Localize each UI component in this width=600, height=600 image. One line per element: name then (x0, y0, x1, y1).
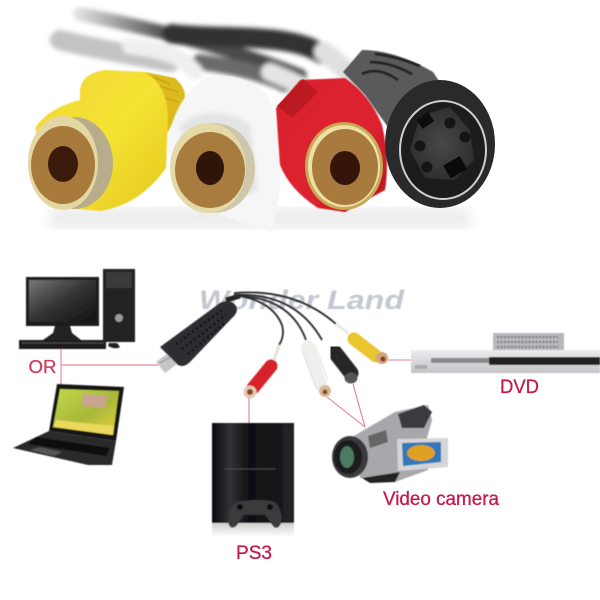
plug: red RCA (244, 345, 279, 398)
connector line: computers (61, 349, 158, 385)
icon: video camera (332, 405, 448, 483)
plug: white RCA (302, 345, 331, 397)
label: Video camera: Video camera (383, 489, 499, 510)
plug: yellow RCA (336, 324, 388, 364)
USB capture dongle (156, 296, 240, 373)
connector: black S-Video (343, 50, 495, 208)
icon: game controller (228, 500, 282, 528)
cables in background (60, 14, 350, 102)
connector: red RCA (276, 78, 387, 212)
icon: DVD player with remote (411, 333, 600, 373)
icon: PS3 console (212, 423, 294, 537)
USB plug (156, 353, 177, 373)
floor reflection (50, 208, 470, 228)
watermark: Wonder Land (199, 285, 405, 315)
icon: desktop computer (19, 269, 135, 349)
cables to connectors (234, 292, 336, 345)
connector lines to devices (249, 360, 411, 427)
label: DVD: DVD (500, 376, 539, 398)
icon: laptop (13, 384, 124, 465)
connector: yellow RCA (28, 70, 185, 211)
label: PS3: PS3 (236, 543, 272, 564)
photo: connector close-up (28, 14, 495, 232)
connector: white RCA (167, 76, 280, 232)
label: OR: OR (28, 356, 56, 377)
plug: S-Video black (333, 350, 358, 384)
